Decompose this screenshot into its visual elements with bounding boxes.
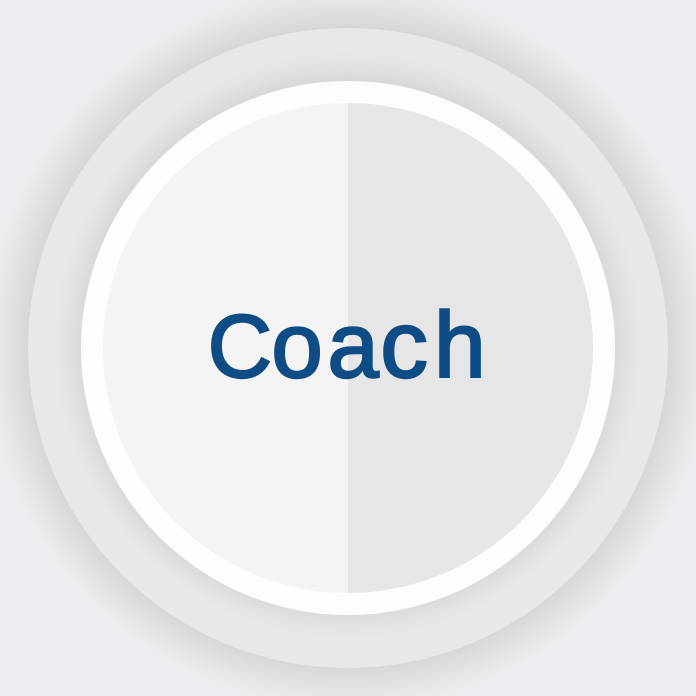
left half of disc [103,103,348,593]
title: a [328,295,380,397]
ring inner shadow [50,47,646,643]
title: C [208,296,272,396]
white ring [81,81,615,615]
title: c [380,292,428,398]
title: h [434,293,486,397]
title: o [272,295,323,397]
right half of disc [348,103,593,593]
central disc [103,103,593,593]
